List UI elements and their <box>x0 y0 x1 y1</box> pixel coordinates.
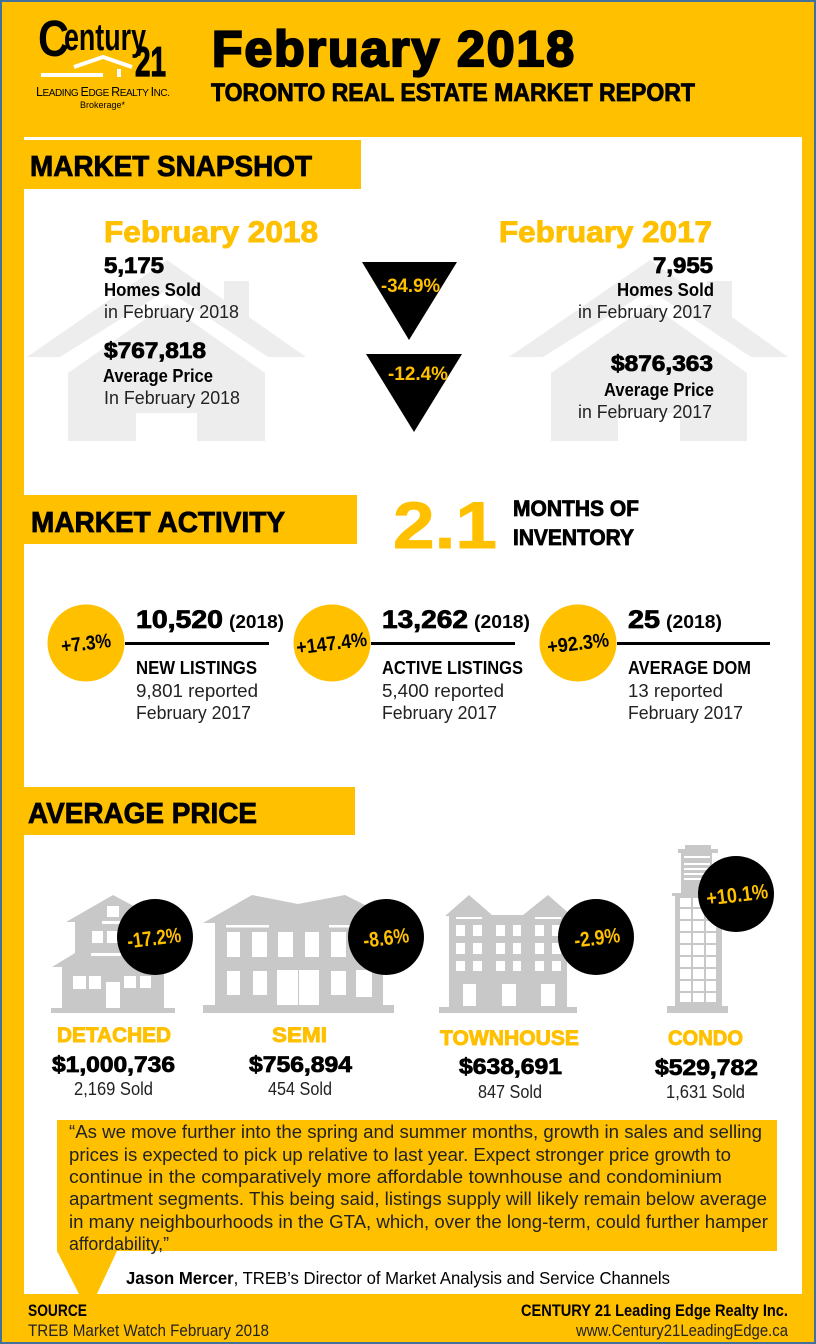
stat: average dom: February 2017 <box>628 703 743 723</box>
badge: +10.1% <box>698 856 774 932</box>
text: February 2018 column: Average Price <box>103 366 213 386</box>
card: condo <box>655 845 774 1102</box>
arrow: average price change <box>366 354 462 432</box>
icon: condo tower <box>667 845 728 1013</box>
label: semi values: SEMI <box>272 1024 327 1047</box>
label: semi values: $756,894 <box>249 1052 353 1077</box>
text: February 2017 column: Homes Sold <box>617 280 714 300</box>
footer: source: SOURCE <box>28 1301 87 1320</box>
heading: market snapshot: MARKET SNAPSHOT <box>30 151 312 183</box>
stat: average dom: 25 <box>628 606 660 634</box>
text: February 2018 column: in February 2018 <box>104 302 239 322</box>
callout: quote: prices is expected to pick up relative to last year. Expect stronger price growth to <box>69 1144 731 1165</box>
footer: brokerage contact: www.Century21LeadingEdge.ca <box>575 1321 788 1340</box>
icon: semi-detached house <box>203 895 394 1013</box>
arrow: homes sold change: -34.9% <box>381 276 440 297</box>
stat: active listings: February 2017 <box>382 703 497 723</box>
callout: quote: in many neighbourhoods in the GTA, which, over the long-term, could further hamper <box>69 1211 768 1232</box>
callout: quote: “As we move further into the spring and summer months, growth in sales and selling <box>69 1121 762 1142</box>
panel: market activity <box>24 488 770 723</box>
stat: months of inventory: INVENTORY <box>513 525 634 550</box>
label: townhouse values <box>440 1027 579 1102</box>
title: February 2018 <box>212 21 574 77</box>
text: February 2017 column: February 2017 <box>499 216 712 249</box>
stat: new listings <box>48 604 284 723</box>
label: townhouse values: TOWNHOUSE <box>440 1027 579 1050</box>
callout: quote: apartment segments. This being said, listings supply will likely remain below average <box>69 1188 767 1209</box>
heading: market activity <box>24 495 357 544</box>
logo: Century 21 Leading Edge Realty: 21 <box>135 38 166 85</box>
badge: -2.9%: -2.9% <box>573 924 622 953</box>
card: townhouse <box>439 895 634 1102</box>
logo: Century 21 Leading Edge Realty <box>36 10 170 110</box>
footer: source <box>28 1301 269 1340</box>
text: February 2018 column: $767,818 <box>104 338 206 363</box>
callout: quote: continue in the comparatively more affordable townhouse and condominium <box>69 1166 722 1187</box>
stat: active listings: 5,400 reported <box>382 681 504 701</box>
subtitle: TORONTO REAL ESTATE MARKET REPORT <box>211 79 695 107</box>
text: February 2017 column: 7,955 <box>653 253 713 278</box>
heading: average price: AVERAGE PRICE <box>28 798 257 830</box>
label: semi values <box>249 1024 353 1099</box>
stat: new listings: +7.3% <box>60 630 112 658</box>
card: detached <box>51 895 193 1099</box>
arrow: homes sold change <box>362 262 457 340</box>
text: February 2018 column <box>103 216 318 408</box>
text: February 2017 column: in February 2017 <box>578 302 712 322</box>
stat: average dom: +92.3% <box>546 629 610 659</box>
heading: market snapshot <box>24 140 361 189</box>
stat: average dom: (2018) <box>666 612 722 632</box>
badge: -8.6% <box>348 899 424 975</box>
stat: active listings <box>294 604 530 723</box>
heading: market activity: MARKET ACTIVITY <box>31 507 285 539</box>
logo: Century 21 Leading Edge Realty: C <box>38 10 69 67</box>
stat: active listings: 13,262 <box>382 606 468 634</box>
logo: Century 21 Leading Edge Realty: Brokerage* <box>80 100 125 110</box>
text: February 2017 column <box>499 216 714 422</box>
footer: source: TREB Market Watch February 2018 <box>28 1321 269 1340</box>
text: February 2018 column: Homes Sold <box>104 280 201 300</box>
text: February 2018 column: 5,175 <box>104 253 164 278</box>
label: condo values: 1,631 Sold <box>666 1082 745 1102</box>
stat: new listings: 9,801 reported <box>136 681 258 701</box>
stat: new listings: 10,520 <box>136 606 223 634</box>
badge: -17.2%: -17.2% <box>126 924 183 953</box>
label: condo values: $529,782 <box>655 1055 758 1080</box>
stat: new listings: February 2017 <box>136 703 251 723</box>
stat: months of inventory: 2.1 <box>393 488 497 562</box>
icon: detached house <box>51 895 175 1013</box>
label: condo values: CONDO <box>668 1027 743 1050</box>
label: townhouse values: $638,691 <box>459 1054 562 1079</box>
badge: +10.1%: +10.1% <box>705 880 770 911</box>
badge: -17.2% <box>117 899 193 975</box>
logo: Century 21 Leading Edge Realty: entury <box>64 17 146 59</box>
icon: house background left <box>27 260 306 441</box>
stat: months of inventory <box>393 488 639 562</box>
stat: active listings: (2018) <box>474 612 530 632</box>
text: February 2017 column: $876,363 <box>611 351 713 376</box>
stat: average dom: 13 reported <box>628 681 723 701</box>
text: February 2018 column: February 2018 <box>104 216 318 249</box>
callout: quote: affordability,” <box>69 1233 169 1254</box>
panel: average price <box>24 787 774 1102</box>
stat: average dom: AVERAGE DOM <box>628 658 751 678</box>
panel: market snapshot <box>24 140 788 441</box>
label: detached values: 2,169 Sold <box>74 1079 153 1099</box>
stat: new listings: NEW LISTINGS <box>136 658 257 678</box>
icon: townhouse <box>439 895 577 1013</box>
label: detached values: DETACHED <box>57 1024 171 1047</box>
label: semi values: 454 Sold <box>268 1079 332 1099</box>
badge: -2.9% <box>558 899 634 975</box>
stat: active listings: ACTIVE LISTINGS <box>382 658 523 678</box>
badge: -8.6%: -8.6% <box>362 924 411 953</box>
logo: Century 21 Leading Edge Realty: LEADING EDGE REALTY INC. <box>36 85 170 99</box>
heading: average price <box>24 787 355 835</box>
stat: average dom <box>540 604 770 723</box>
label: detached values <box>52 1024 175 1099</box>
text: February 2018 column: In February 2018 <box>104 388 240 408</box>
footer: brokerage contact <box>521 1301 788 1340</box>
stat: months of inventory: MONTHS OF <box>513 496 639 521</box>
label: condo values <box>655 1027 758 1102</box>
text: February 2017 column: Average Price <box>604 380 714 400</box>
label: detached values: $1,000,736 <box>52 1052 175 1077</box>
text: quote attribution: Jason Mercer, TREB’s Director of Market Analysis and Service Channels <box>126 1268 670 1288</box>
text: February 2017 column: in February 2017 <box>578 402 712 422</box>
stat: new listings: (2018) <box>229 612 284 632</box>
label: townhouse values: 847 Sold <box>478 1082 542 1102</box>
icon: house background right <box>509 260 788 441</box>
card: semi <box>203 895 424 1099</box>
stat: active listings: +147.4% <box>295 629 368 659</box>
callout: quote <box>57 1120 777 1296</box>
arrow: average price change: -12.4% <box>388 364 448 385</box>
